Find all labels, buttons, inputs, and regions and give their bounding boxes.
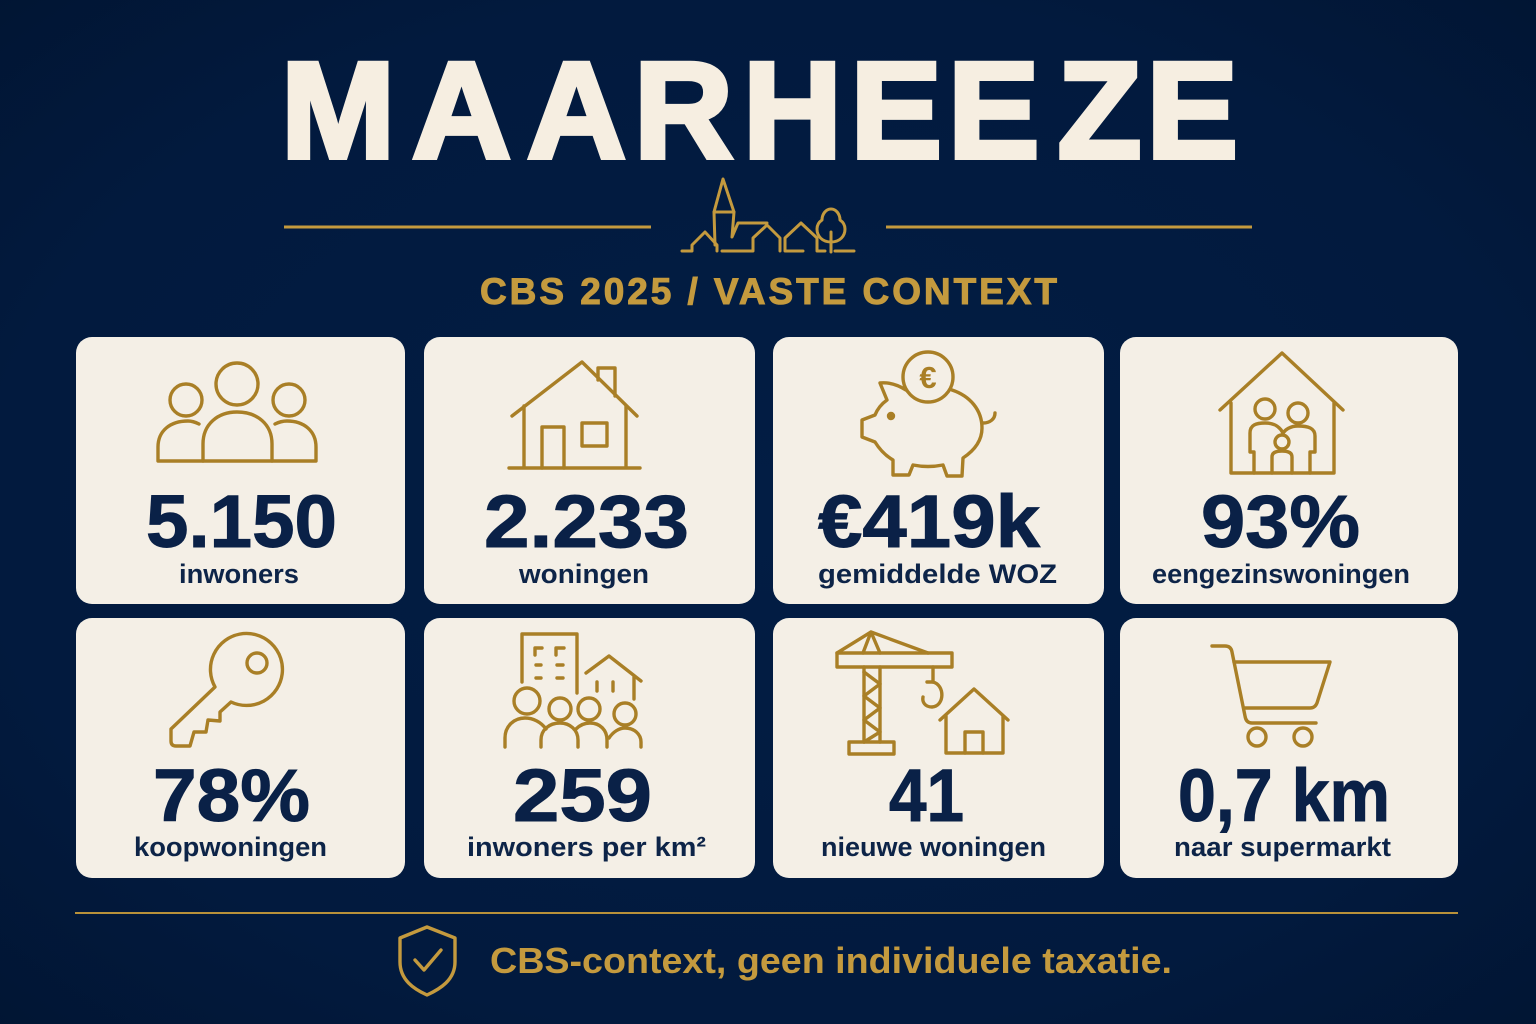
label: woningen <box>518 559 649 589</box>
value: €419k <box>818 480 1041 563</box>
divider with village skyline icon <box>284 179 1252 252</box>
panel: koopwoningen <box>76 618 405 878</box>
icon: buildings and crowd <box>505 634 641 747</box>
icon: crane and house <box>837 632 1008 754</box>
panel: eengezinswoningen <box>1120 337 1458 604</box>
label: naar supermarkt <box>1174 832 1391 862</box>
value: 78% <box>153 754 310 837</box>
value: 93% <box>1201 480 1360 563</box>
icon: key <box>171 633 282 746</box>
icon: shopping cart <box>1212 646 1330 746</box>
title: MAARHEEZE <box>281 34 1238 188</box>
icon: shield with check <box>400 927 455 995</box>
label: eengezinswoningen <box>1152 559 1410 589</box>
icon: house <box>509 362 640 468</box>
value: 41 <box>889 754 964 837</box>
icon: people <box>158 363 316 461</box>
label: gemiddelde WOZ <box>818 559 1057 589</box>
panel: inwoners <box>76 337 405 604</box>
panel: inwoners per km2 <box>424 618 755 878</box>
footer note: CBS-context, geen individuele taxatie. <box>490 940 1172 981</box>
panel: gemiddelde WOZ <box>773 337 1104 604</box>
value: 2.233 <box>484 480 689 563</box>
icon: piggy bank with euro coin: € <box>919 360 937 395</box>
panel: woningen <box>424 337 755 604</box>
icon: family in house <box>1220 353 1343 473</box>
label: inwoners <box>179 559 299 589</box>
value: 5.150 <box>146 480 337 563</box>
label: koopwoningen <box>134 832 327 862</box>
subtitle: CBS 2025 / VASTE CONTEXT <box>480 271 1057 312</box>
icon: village skyline <box>682 179 854 252</box>
value: 0,7 km <box>1178 754 1390 837</box>
label: inwoners per km² <box>467 832 706 862</box>
value: 259 <box>513 754 652 837</box>
panel: naar supermarkt <box>1120 618 1458 878</box>
label: nieuwe woningen <box>821 832 1046 862</box>
panel: nieuwe woningen <box>773 618 1104 878</box>
icon: piggy bank with euro coin <box>862 352 995 476</box>
